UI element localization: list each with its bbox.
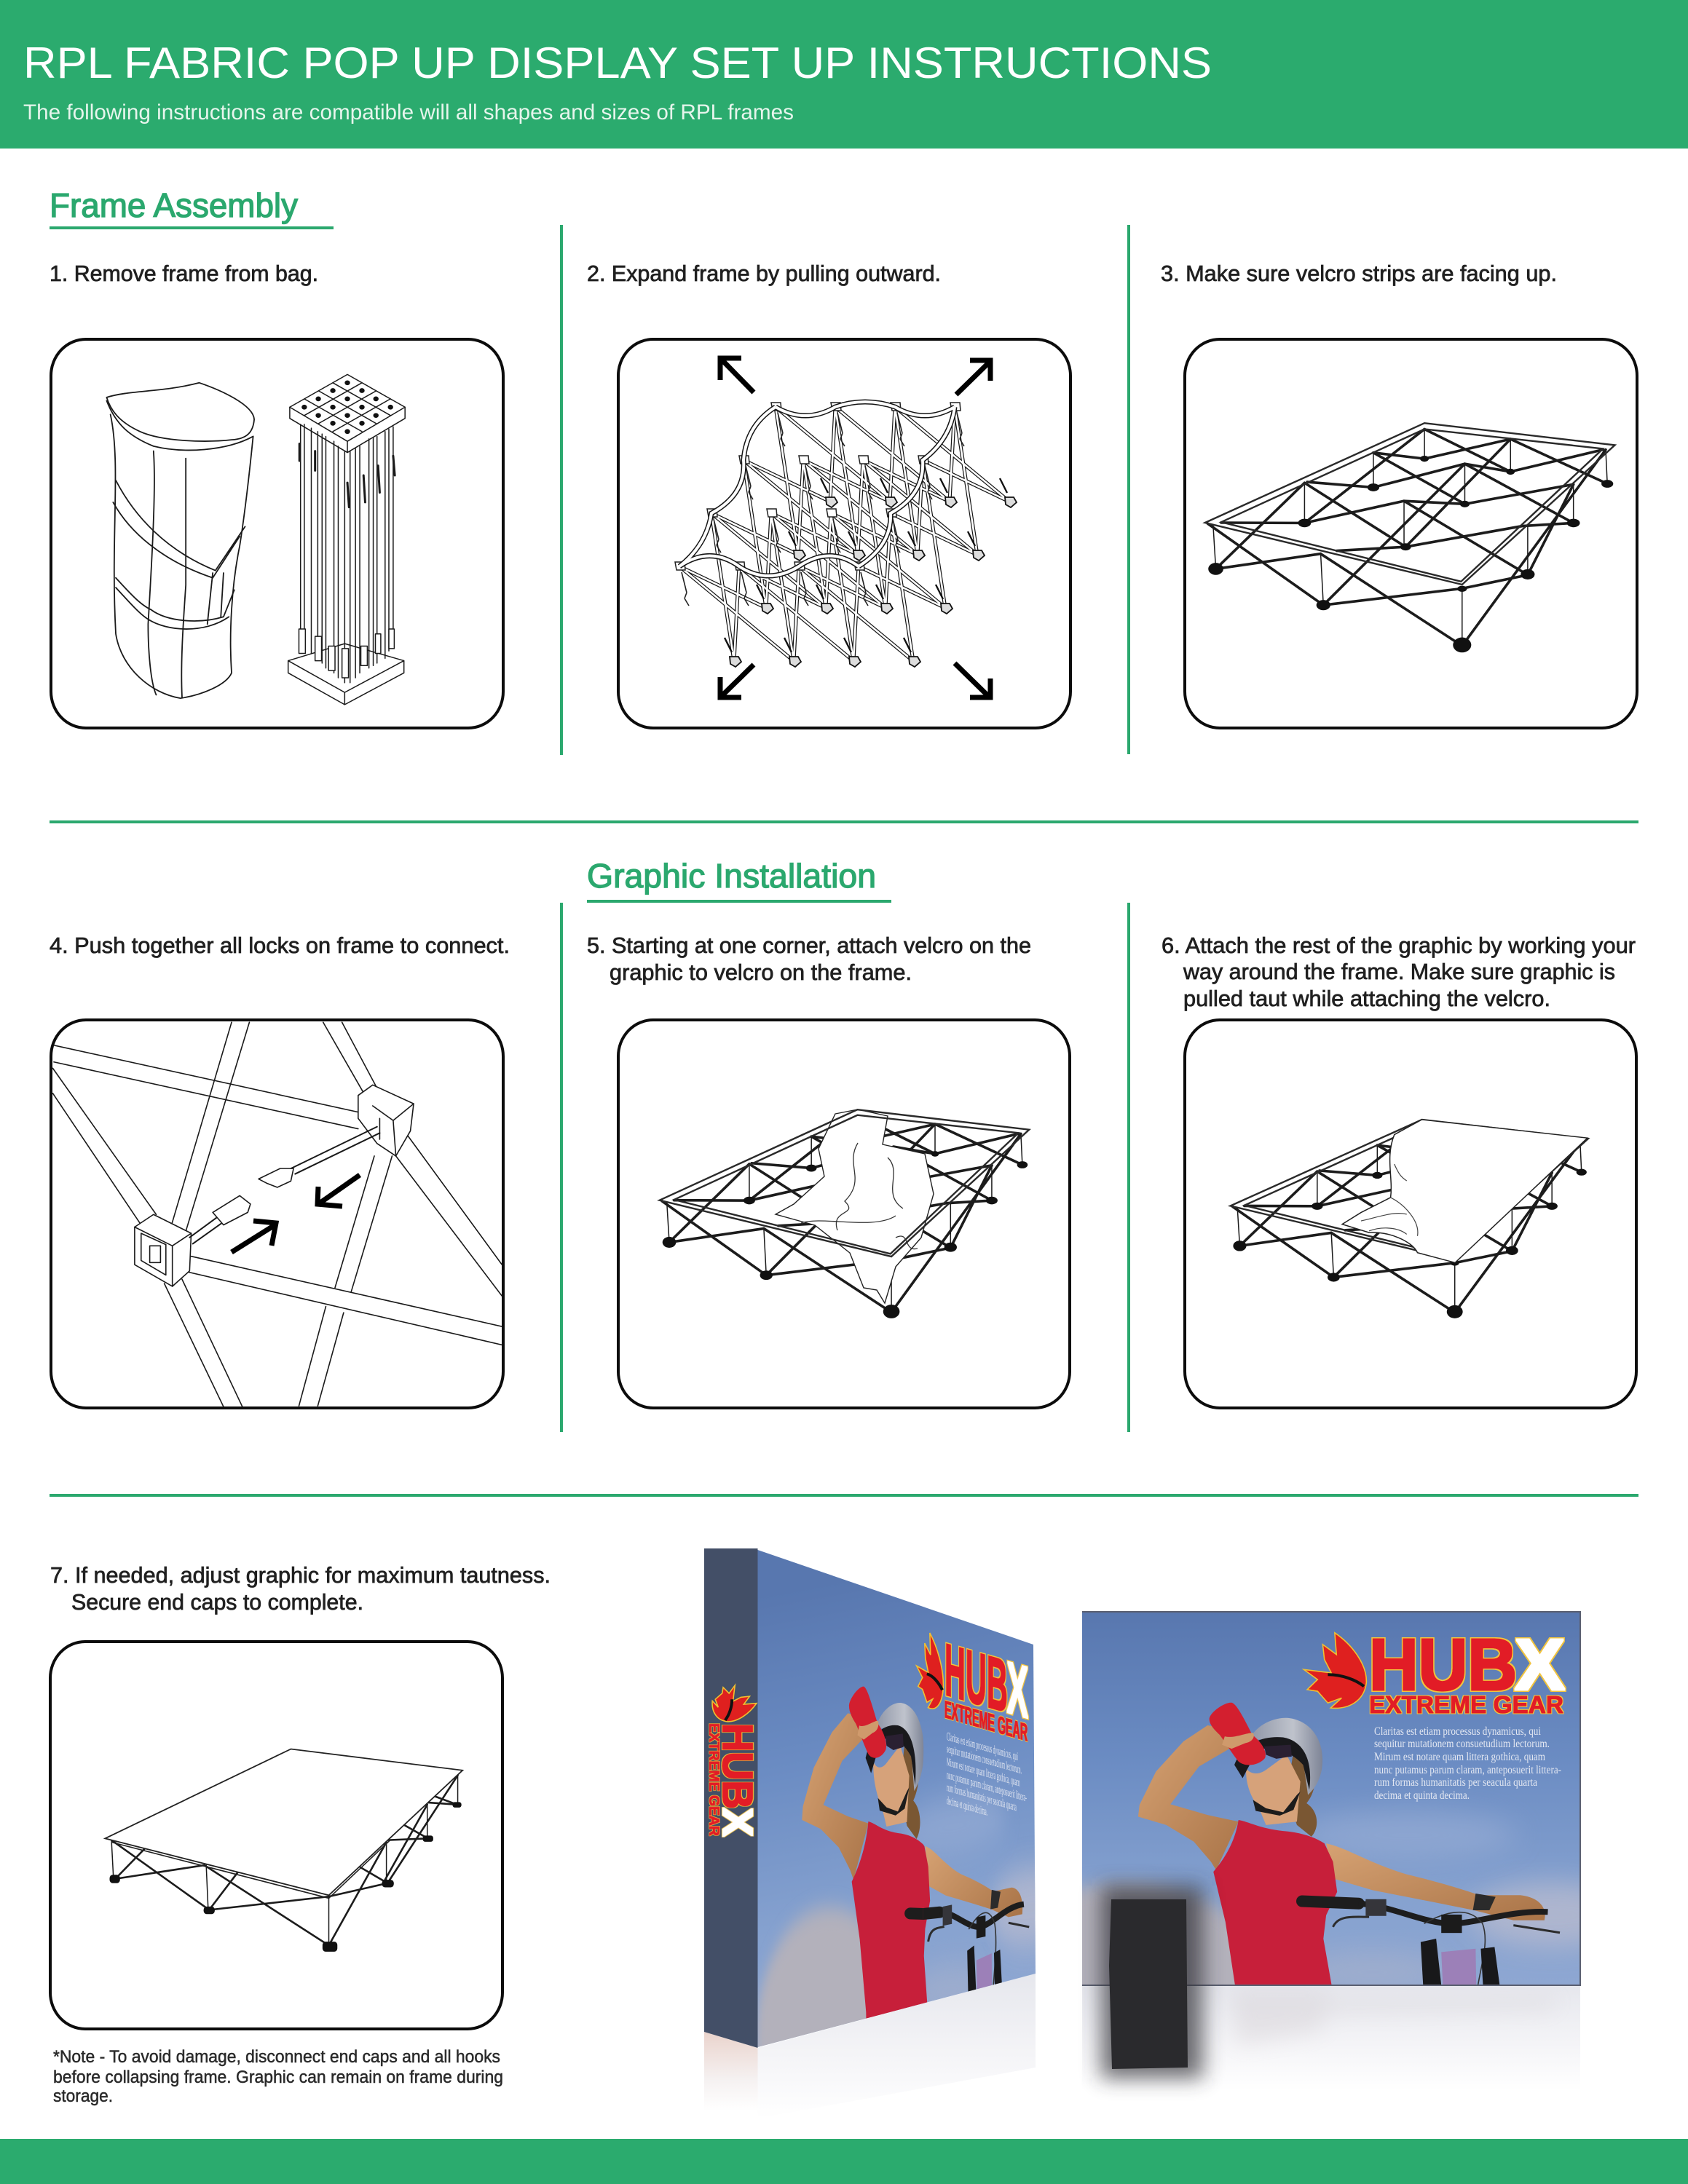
column divider: middle right [1127,903,1130,1432]
side logo: EXTREME GEAR [706,1723,721,1836]
side logo: X [714,1808,761,1837]
logo [1304,1624,1565,1718]
arrow: pushing right [232,1221,276,1252]
front logo: X [1007,1647,1028,1734]
step 6 text: way around the frame. Make sure graphic is [1183,959,1615,984]
footer bar [0,2139,1688,2184]
panel: step 2 expanding frame [618,339,1070,728]
body copy: Claritas est etiam processus dynamicus, qui [1374,1725,1541,1738]
floor reflection: side [704,2032,757,2111]
section heading: frame assembly: Frame Assembly [50,186,298,224]
step 1 text: 1. Remove frame from bag. [50,261,318,286]
note text: before collapsing frame. Graphic can remain on frame during [53,2068,503,2087]
reflected figure [1231,1991,1558,2046]
body copy: nunc putamus parum claram, anteposuerit littera- [1374,1764,1561,1776]
arrow: down right [955,663,990,697]
illustration: locks connecting [52,1022,502,1406]
display front graphic [757,1550,1036,2047]
floor reflection: front [757,1974,1036,2118]
column divider: top right [1127,225,1130,754]
front body copy: decima et quinta decima. [947,1794,987,1819]
panel: step 5 attaching graphic at corner [618,1020,1070,1408]
step 3 text: 3. Make sure velcro strips are facing up. [1161,261,1557,286]
arrow: down left [720,665,754,697]
illustration: fully covered frame [105,1749,462,1952]
body copy: sequitur mutationem consuetudium lectorum. [1374,1738,1550,1750]
front body copy [947,1730,1027,1829]
note text: storage. [53,2086,113,2106]
column divider: middle left [560,903,563,1432]
panel: step 3 expanded frame [1185,339,1637,728]
column divider: top left [560,225,563,755]
photo: assembled display front view with bag [1082,1611,1581,2094]
row divider 1 [50,820,1638,823]
step 5 text [587,933,1031,985]
side logo: HUB [714,1723,761,1809]
side logo [706,1685,761,1837]
step 7 text: Secure end caps to complete. [71,1589,363,1615]
front body copy: Mirum est notare quam littera gothica, quam [947,1755,1020,1789]
body copy [1374,1725,1561,1802]
note text: *Note - To avoid damage, disconnect end caps and all hooks [53,2047,500,2067]
illustration: frame with partial graphic [660,1109,1029,1318]
step 6 text [1162,933,1636,1011]
body copy: Mirum est notare quam littera gothica, quam [1374,1751,1545,1763]
logo: EXTREME GEAR [1369,1691,1563,1718]
body copy: rum formas humanitatis per seacula quarta [1374,1776,1537,1789]
panel: step 6 graphic mostly attached [1185,1020,1636,1408]
subtitle: The following instructions are compatible will all shapes and sizes of RPL frames [23,100,794,124]
title: RPL FABRIC POP UP DISPLAY SET UP INSTRUCTIONS [23,39,1212,87]
step 6 text: 6. Attach the rest of the graphic by working your [1162,933,1636,958]
illustration: expanding scissor frame [675,402,1017,667]
arrow: up left [720,358,754,392]
logo: X [1515,1624,1565,1706]
header banner [0,0,1688,149]
front body copy: Claritas est etiam processus dynamicus, qui [947,1730,1018,1763]
arrow: up right [956,360,990,395]
illustration: folded frame bundle [288,374,405,705]
illustration: frame with velcro up [1205,423,1615,652]
display graphic [1082,1613,1579,1985]
display side panel [704,1548,757,2048]
note text [53,2047,503,2106]
panel: step 1 bag and folded frame [51,339,503,728]
front logo: EXTREME GEAR [944,1697,1028,1746]
front body copy: sequitur mutationem consuetudium lectorum. [947,1742,1022,1776]
step 5 text: 5. Starting at one corner, attach velcro on the [587,933,1031,958]
step 4 text: 4. Push together all locks on frame to connect. [50,933,510,958]
front body copy: nunc putamus parum claram, anteposuerit littera- [947,1768,1027,1804]
step 7 text: 7. If needed, adjust graphic for maximum tautness. [50,1562,551,1588]
row divider 2 [50,1494,1638,1497]
floor reflection [1082,1985,1580,2091]
photo: assembled display angled view [704,1548,1036,2092]
body copy: decima et quinta decima. [1374,1789,1470,1802]
front logo [917,1621,1028,1747]
illustration: frame with most of graphic [1231,1120,1588,1318]
front logo: HUB [944,1629,1008,1728]
step 5 text: graphic to velcro on the frame. [610,960,912,985]
illustration: carry bag [106,383,254,698]
arrow: pushing left [318,1175,360,1206]
step 7 text [50,1562,551,1615]
front body copy: rum formas humanitatis per seacula quarta [947,1781,1017,1813]
step 2 text: 2. Expand frame by pulling outward. [587,261,941,286]
panel: step 7 finished display face down [50,1642,502,2029]
logo: HUB [1369,1624,1517,1706]
step 6 text: pulled taut while attaching the velcro. [1183,986,1550,1011]
carry bag shadow [1101,1886,1203,2078]
section heading: graphic installation: Graphic Installation [587,857,876,895]
panel: step 4 frame lock detail [51,1020,503,1408]
graphic edge [1082,1612,1580,1985]
carry bag [1109,1899,1188,2069]
